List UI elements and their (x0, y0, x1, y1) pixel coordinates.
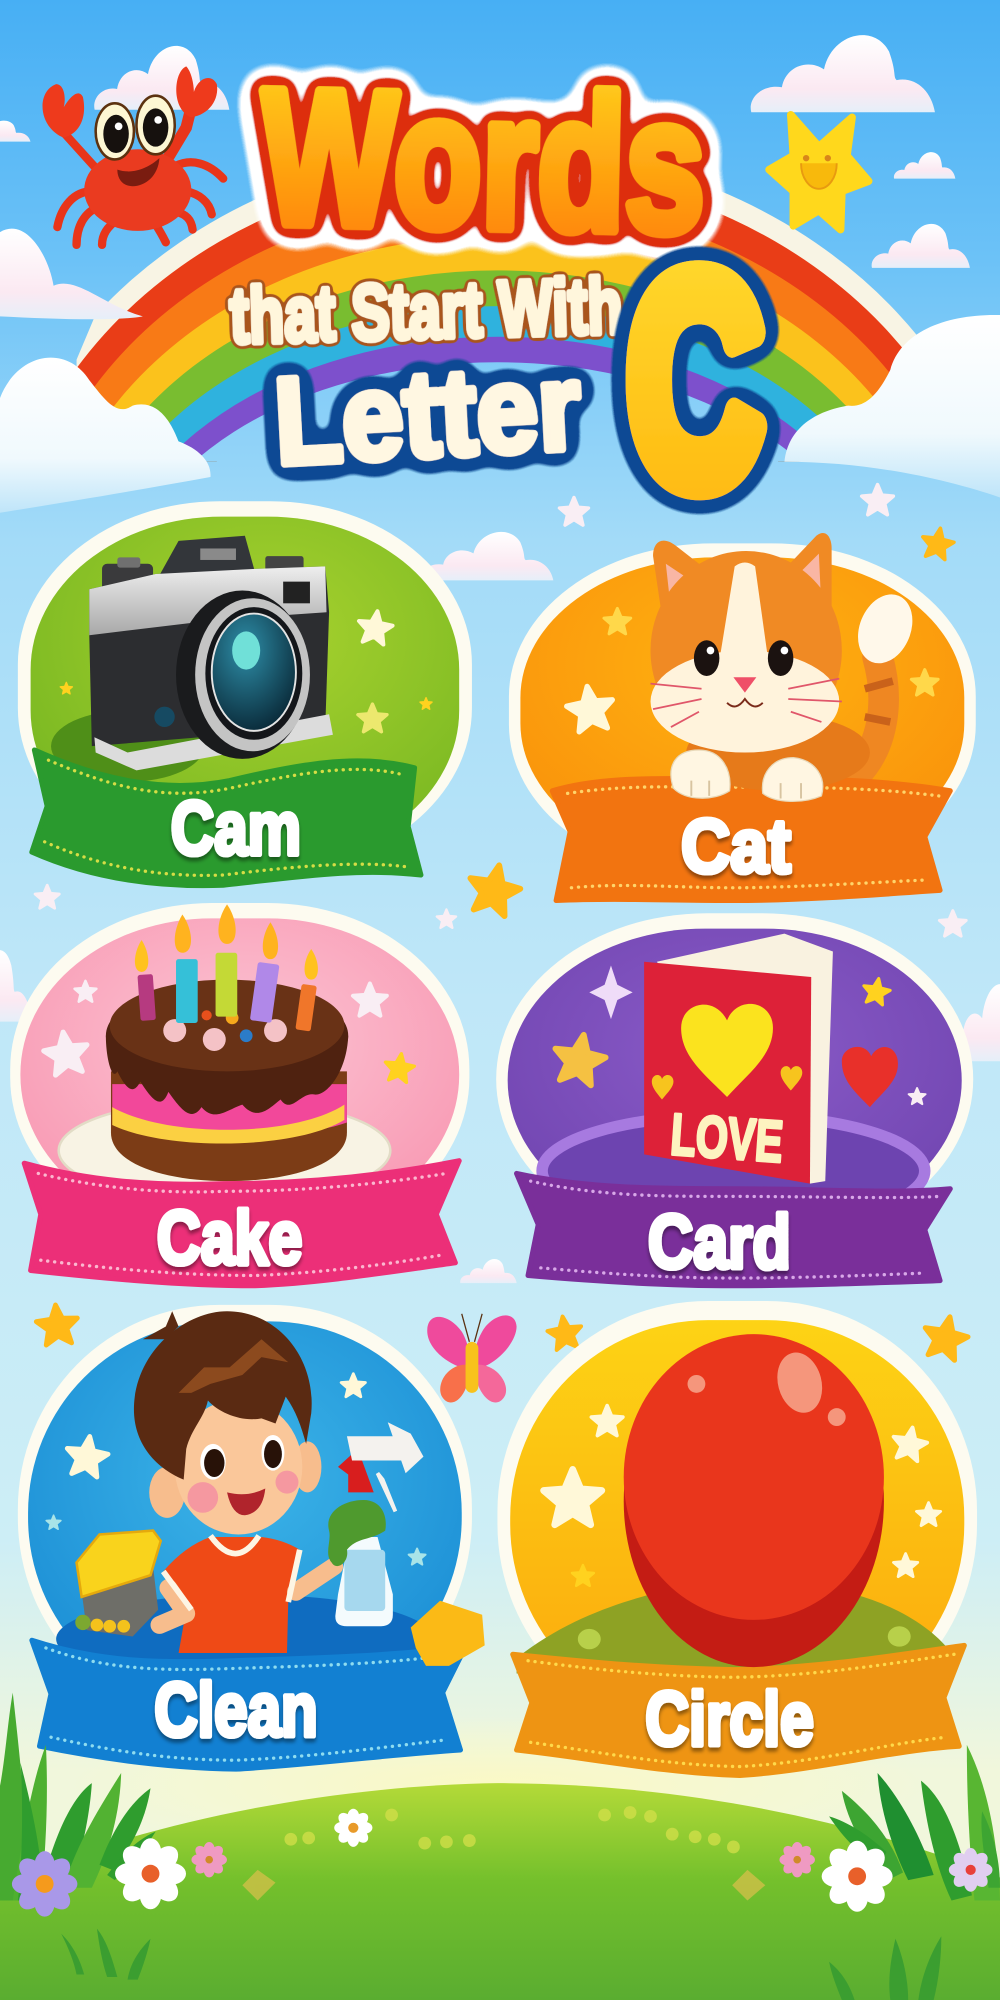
icon: cake (106, 980, 348, 1181)
decorative stars (46, 1374, 426, 1565)
panel: Card (496, 913, 973, 1286)
left grass tuft (0, 1693, 156, 1901)
grass hill (0, 1783, 1000, 2000)
crab mascot (43, 66, 223, 245)
ribbon (32, 750, 421, 886)
icon: butterfly (427, 1314, 517, 1403)
title (229, 49, 763, 545)
icon: candles (135, 904, 318, 1031)
decorative stars (564, 608, 938, 733)
smiling star top right (769, 115, 869, 230)
panel backdrop (18, 1305, 472, 1722)
icon: red circle (624, 1334, 884, 1667)
panel backdrop (509, 543, 976, 878)
panel: Clean (18, 1305, 485, 1769)
ribbon (517, 1173, 950, 1286)
icon: cat tail (848, 586, 922, 773)
title word: Letter: Letter (271, 337, 584, 490)
rainbow (76, 192, 916, 462)
background clouds (0, 35, 1000, 1283)
label: Clean: Clean (154, 1668, 318, 1753)
panel: Cake (10, 903, 469, 1286)
title letter: C: C (628, 214, 763, 545)
ribbon (24, 1161, 459, 1286)
ribbon (552, 778, 950, 901)
title line: that Start With: that Start With (229, 261, 624, 360)
icon: sponge in hand (75, 1531, 161, 1636)
icon: yellow sponge (411, 1601, 485, 1666)
decorative stars (544, 1406, 941, 1586)
bottom grass tufts (61, 1929, 941, 2000)
panel backdrop (496, 913, 973, 1245)
title word: Words: Words (259, 49, 707, 273)
label: Card: Card (648, 1200, 791, 1285)
icon: spray bottle (328, 1422, 423, 1626)
ribbon (32, 1640, 466, 1769)
panel: Cam (18, 501, 472, 886)
icon: camera (89, 536, 333, 770)
panel: Cat (509, 533, 976, 901)
panel backdrop (10, 903, 469, 1244)
panel backdrop (497, 1301, 977, 1735)
label: Cat: Cat (681, 804, 791, 889)
horizon glow (64, 1716, 931, 1856)
decorative stars (60, 609, 432, 732)
flowers (12, 1809, 993, 1917)
hill (517, 1594, 950, 1673)
label: Cake: Cake (157, 1196, 302, 1281)
icon: red heart (842, 1047, 898, 1107)
card text: LOVE: LOVE (669, 1102, 785, 1175)
scattered stars (35, 485, 971, 1362)
meadow dots (242, 1806, 765, 1901)
label: Circle: Circle (645, 1677, 814, 1762)
panel: Circle (497, 1301, 977, 1776)
icon: boy (134, 1311, 334, 1653)
decorative stars (42, 981, 416, 1083)
foreground clouds (0, 229, 1000, 513)
decorative stars (550, 966, 926, 1104)
plate (59, 1099, 390, 1202)
icon: greeting card (644, 934, 833, 1184)
icon: cat (651, 533, 870, 801)
ribbon (513, 1645, 964, 1776)
label: Cam: Cam (171, 787, 301, 872)
right grass tuft (829, 1745, 1000, 1901)
panel backdrop (18, 501, 472, 871)
